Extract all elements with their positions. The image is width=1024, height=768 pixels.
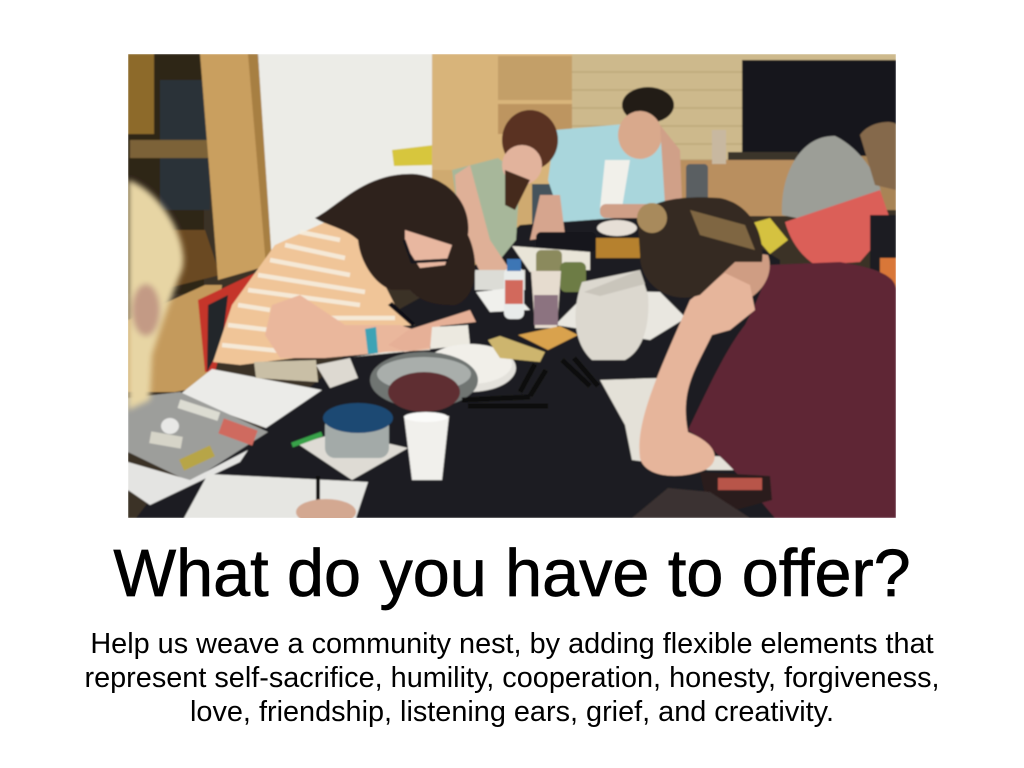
plate and items at the back of the table <box>475 220 686 340</box>
table <box>136 210 780 518</box>
white jug <box>575 270 648 360</box>
photo: group writing at a table <box>128 54 896 518</box>
person in grey beanie and red hair <box>745 122 896 295</box>
woman in striped shirt <box>213 174 476 365</box>
documents on left <box>128 358 358 505</box>
glass container with blue lid <box>323 403 393 458</box>
notebook under her hands <box>352 325 470 357</box>
left chair and lower wall <box>128 272 255 394</box>
napkin <box>292 432 408 480</box>
person: back centre, boy with hand on forehead <box>548 87 682 222</box>
body text: love, friendship, listening ears, grief, and creativity. <box>190 696 834 728</box>
bag at bottom right <box>700 472 772 510</box>
paper cup near front <box>404 412 449 480</box>
paper cup <box>531 271 561 328</box>
bottle <box>504 259 524 319</box>
person: back girl in green top <box>452 110 565 272</box>
person in maroon t-shirt <box>637 197 896 518</box>
paper plates <box>424 344 516 392</box>
room background <box>128 54 896 518</box>
body text <box>84 628 940 728</box>
blurred person at left edge <box>128 180 183 410</box>
body text: Help us weave a community nest, by adding flexible elements that <box>90 628 934 660</box>
pens on table <box>462 358 598 406</box>
title: What do you have to offer? <box>113 537 911 611</box>
open book in front of maroon shirt <box>599 376 734 472</box>
body text: represent self-sacrifice, humility, cooperation, honesty, forgiveness, <box>84 662 940 694</box>
sketchbook at bottom <box>183 473 370 518</box>
bowl of grapes <box>370 352 478 412</box>
pen bag <box>488 336 545 362</box>
